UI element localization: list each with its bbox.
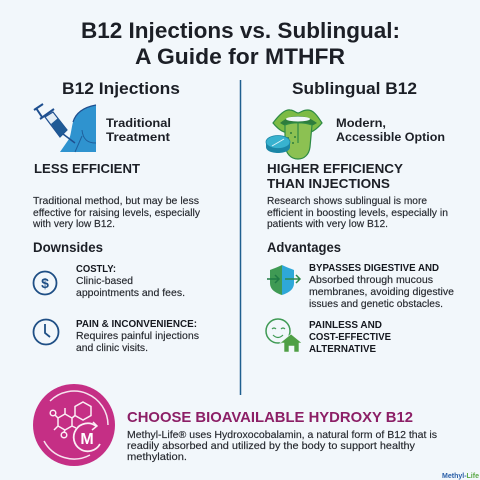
- subheading: downsides: Downsides: [33, 240, 103, 255]
- icon: shield with arrows: [267, 265, 300, 295]
- heading: sublingual B12: Sublingual B12: [292, 79, 417, 98]
- heading: choose bioavailable hydroxy B12: CHOOSE BIOAVAILABLE HYDROXY B12: [127, 409, 413, 426]
- item: costly: appointments and fees.: [76, 287, 185, 299]
- item: pain and inconvenience: Requires painful injections: [76, 330, 199, 342]
- text: methyl-life description: readily absorbed and utilized by the body to support healthy: [127, 440, 416, 452]
- icon: syringe and arm: [34, 104, 96, 152]
- item: bypasses digestive: BYPASSES DIGESTIVE AND: [309, 263, 439, 274]
- item: bypasses digestive: issues and genetic obstacles.: [309, 298, 443, 310]
- text: injections description: with very low B12.: [32, 218, 115, 230]
- icon: tongue and tablet: [266, 110, 322, 159]
- label: modern accessible option: Accessible Option: [336, 130, 445, 144]
- subheading: higher efficiency: THAN INJECTIONS: [267, 176, 390, 191]
- item: bypasses digestive: Absorbed through mucous: [309, 274, 433, 286]
- subheading: higher efficiency: HIGHER EFFICIENCY: [267, 161, 403, 176]
- item: pain and inconvenience: [34, 319, 199, 354]
- item: painless and cost-effective: PAINLESS AND: [309, 320, 382, 331]
- text: injections description: [32, 195, 201, 230]
- text: sublingual description: Research shows sublingual is more: [267, 195, 427, 207]
- text: sublingual description: patients with very low B12.: [267, 218, 388, 230]
- icon: magenta molecule badge: [33, 384, 115, 466]
- label: traditional treatment: Traditional: [106, 116, 171, 130]
- item: painless and cost-effective: ALTERNATIVE: [309, 344, 376, 355]
- icon: dollar coin: [34, 272, 56, 294]
- title: [81, 18, 400, 69]
- item: costly: Clinic-based: [76, 275, 133, 287]
- label: modern accessible option: Modern,: [336, 116, 386, 130]
- label: traditional treatment: Treatment: [106, 130, 170, 144]
- icon: dollar coin: $: [41, 275, 49, 291]
- text: methyl-life description: [127, 429, 437, 463]
- panel: B12 injections: [32, 79, 201, 354]
- item: bypasses digestive: membranes, avoiding digestive: [309, 286, 454, 298]
- text: injections description: effective for raising levels, especially: [33, 207, 201, 219]
- item: costly: [34, 264, 185, 299]
- label: modern accessible option: [336, 116, 445, 144]
- title: B12 Injections vs. Sublingual:: [81, 18, 400, 43]
- panel: choose bioavailable hydroxy B12: [33, 384, 437, 466]
- icon: clock: [34, 320, 58, 344]
- logo: Methyl-Life: Methyl-Life: [442, 473, 479, 480]
- panel: sublingual B12: [266, 79, 454, 355]
- text: sublingual description: [267, 195, 448, 230]
- title: A Guide for MTHFR: [135, 44, 345, 69]
- icon: magenta molecule badge: M: [80, 431, 94, 448]
- item: painless and cost-effective: [266, 319, 391, 355]
- item: painless and cost-effective: COST-EFFECTIVE: [309, 332, 391, 343]
- item: pain and inconvenience: and clinic visits.: [76, 342, 148, 354]
- item: bypasses digestive: [267, 263, 454, 310]
- subheading: higher efficiency: [267, 161, 403, 191]
- text: methyl-life description: Methyl-Life® uses Hydroxocobalamin, a natural form of B12 that is: [127, 429, 437, 441]
- text: injections description: Traditional method, but may be less: [33, 195, 199, 207]
- subheading: less efficient: LESS EFFICIENT: [34, 161, 140, 176]
- label: traditional treatment: [106, 116, 171, 144]
- subheading: advantages: Advantages: [267, 240, 341, 255]
- text: methyl-life description: methylation.: [127, 451, 187, 463]
- item: pain and inconvenience: PAIN & INCONVENIENCE:: [76, 319, 197, 330]
- heading: B12 Injections: B12 Injections: [62, 79, 180, 98]
- icon: smiley and house: [266, 319, 302, 352]
- item: costly: COSTLY:: [76, 264, 116, 275]
- text: sublingual description: efficient in boosting levels, especially in: [267, 207, 448, 219]
